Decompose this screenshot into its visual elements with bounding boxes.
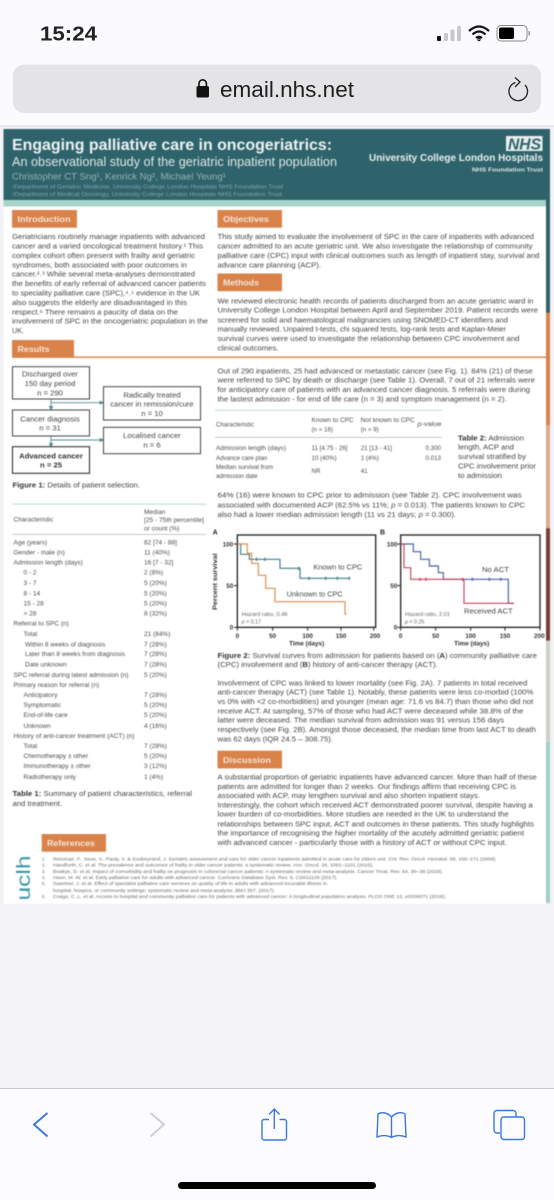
introduction text: cancer and a varied oncological treatment history.¹ This <box>12 244 204 251</box>
discussion text: the importance of recognising the higher mortality of the acutely admitted geriatric patient <box>218 831 524 838</box>
table 1 rows: Total <box>24 631 38 638</box>
table 1 rows: 5 (20%) <box>144 600 167 608</box>
table 1 rows: Chemotherapy ± other <box>24 753 89 760</box>
introduction text: to speciality palliative care (SPC),⁴˒⁵ evidence in the UK <box>12 291 200 298</box>
chart A: survival by CPC involvement: A <box>213 529 218 536</box>
axis ticks and labels: 50 <box>269 633 277 640</box>
table 2 header <box>216 417 442 433</box>
results paragraph: CPC: associated with documented ACP (62.5% vs 11%; p = 0.013). The patients known to CPC <box>218 502 525 509</box>
address text: email.nhs.net <box>220 77 354 102</box>
results paragraph: were referred to SPC by death or discharge (see Table 1). Overall, 7 out of 21 referrals were <box>216 378 535 385</box>
heading: references <box>42 834 106 852</box>
results paragraph: CPC: also had a lower median admission length (11 vs 21 days; p = 0.300). <box>218 512 456 519</box>
objectives text: cancer admitted to an acute geriatric unit. We also investigate the relationship of community <box>218 244 533 251</box>
table 1 rows: 7 (28%) <box>144 642 167 648</box>
table 1 rows: History of anti-cancer treatment (ACT) (n) <box>14 733 134 740</box>
introduction text: involvement of SPC in the oncogeriatric population in the <box>12 319 208 326</box>
table 1 rows: 5 (20%) <box>144 702 167 709</box>
discussion text <box>216 774 537 847</box>
references list: Craigs, C. L. et al. Access to hospital and community palliative care for patients with advanced cancer: A longitudinal population analysis. PLOS ONE 13, e0200071 (2018). <box>53 894 446 899</box>
heading: discussion: Discussion <box>223 756 271 765</box>
table 2 rows: 10 (40%) <box>312 455 337 462</box>
introduction text: also suggests the elderly are disadvantaged in this <box>12 300 188 307</box>
table 1 rows: 7 (28%) <box>144 651 167 658</box>
curve label: unknown: Unknown to CPC <box>287 590 343 599</box>
table 1 rows: 3 - 7 <box>24 580 37 587</box>
curve: received ACT <box>401 544 514 603</box>
discussion text: associated with ACP, may lengthen survival and also shorten inpatient stays. <box>218 793 480 800</box>
figure 2 caption: Figure 2: Survival curves from admission for patients based on ( A) community palliative care <box>218 653 537 660</box>
table 1 rows: 3 (12%) <box>144 763 167 770</box>
table 1 rows <box>14 540 177 781</box>
box: cancer diagnosis: n = 31 <box>39 423 61 432</box>
references list <box>42 856 496 899</box>
table 1 header: Characteristic <box>14 516 54 524</box>
table 1 rows: > 28 <box>24 610 37 618</box>
discussion text: lower burden of co-morbidities. More studies are needed in the UK to understand the <box>218 812 509 819</box>
trust sub name: NHS Foundation Trust <box>472 168 543 174</box>
chart B: survival by ACT history <box>380 529 545 648</box>
table 1 rows: 7 (28%) <box>144 743 167 750</box>
hazard ratio B: p = 0.25 <box>404 620 424 626</box>
discussion text: with advanced cancer - particularly those with a history of ACT or without CPC input. <box>216 840 507 847</box>
figure 1: patient selection flowchart <box>12 367 200 473</box>
table 1 rows: 5 (20%) <box>144 753 167 760</box>
icon: bookmarks book <box>377 1113 406 1138</box>
discussion text: A substantial proportion of geriatric inpatients have advanced cancer. More than half of these <box>218 774 537 781</box>
methods text: University College London Hospital between April and September 2019. Patient records were <box>218 308 538 315</box>
table 1 rows: Total <box>24 743 38 750</box>
figure 2: survival curves <box>212 529 545 648</box>
table 1 header <box>14 509 204 532</box>
table 2 rows: 0.013 <box>426 455 442 462</box>
table 2 caption: Table 2: Admission <box>458 433 524 442</box>
authors: Christopher CT Sng¹, Kenrick Ng², Michael Yeung¹ <box>12 172 226 182</box>
objectives text <box>218 234 540 270</box>
objectives text: palliative care (CPC) input with clinical outcomes such as length of inpatient stay, survival and <box>218 253 540 260</box>
axis ticks and labels: 0 <box>230 625 234 632</box>
introduction text <box>12 234 208 335</box>
table 1 rows: Anticipatory <box>24 692 58 699</box>
table 1 rows: Immunotherapy ± other <box>24 763 91 770</box>
table 1 rows: Symptomatic <box>24 702 62 709</box>
axis ticks and labels: 100 <box>387 541 398 548</box>
results paragraph: ACT: respectively (see Fig. 2B). Amongst those deceased, the median time from last ACT to death <box>218 727 536 734</box>
table 2 rows: Advance care plan <box>216 455 268 462</box>
table 2 caption: survival stratified by <box>458 452 526 461</box>
table 1 rows: 7 (28%) <box>144 662 167 668</box>
table 1 rows: 5 (20%) <box>144 712 167 719</box>
heading: discussion <box>218 751 282 768</box>
table 2 caption: length, ACP and <box>458 442 514 451</box>
table 1 rows: 0 - 2 <box>24 570 37 576</box>
box: localised cancer: n = 6 <box>143 440 161 449</box>
curve: unknown to CPC <box>237 544 347 614</box>
icon: wifi <box>469 26 489 40</box>
table 1 caption <box>12 789 192 808</box>
curve label: known: Known to CPC <box>313 563 363 572</box>
axis ticks and labels: Time (days) <box>289 641 324 648</box>
figure 2 caption <box>218 653 537 669</box>
table 2 rows: Median survival from <box>216 464 273 471</box>
table 2 header: Not known to CPC <box>361 417 415 424</box>
browser bottom toolbar <box>0 1088 554 1200</box>
axis ticks and labels <box>387 541 545 648</box>
table 2 rows <box>216 445 442 480</box>
table 1 rows: Radiotherapy only <box>24 774 77 781</box>
table 1 rows: Primary reason for referral (n) <box>14 682 99 689</box>
affiliations: ¹Department of Geriatric Medicine, University College London Hospitals NHS Foundation Trust <box>12 184 284 190</box>
box: discharged: n = 290 <box>37 388 63 397</box>
references list: Retornaz, F., Seux, V., Pauly, V. & Soubeyrand, J. Geriatric assessment and care for older cancer inpatients admitted in acute care for elders unit. Crit. Rev. Oncol. Hematol. 68, 165–171 (2008). <box>53 856 496 862</box>
icon: reload <box>509 78 528 101</box>
icon: tabs <box>494 1110 524 1140</box>
table 2 rows: 11 [4.75 - 26] <box>312 445 348 452</box>
references list: hospital, hospice, or community settings: systematic review and meta-analysis. BMJ 357, (2017). <box>53 888 275 893</box>
results paragraph: ACT: anti-cancer therapy (ACT) (see Table 1). Notably, these patients were less co-morbid (100% <box>218 690 533 697</box>
axis ticks and labels: 100 <box>465 633 476 640</box>
table 2 rows: 0.300 <box>426 445 442 452</box>
methods text: screened for solid and haematological malignancies using SNOMED-CT identifiers and <box>218 317 508 324</box>
address bar <box>13 64 541 113</box>
table 2 header: Characteristic <box>216 421 254 428</box>
box: radically treated: Radically treated <box>123 390 181 399</box>
results paragraph: ACT <box>216 680 536 743</box>
table 1 rows: 2 (8%) <box>144 570 163 576</box>
hazard ratio A: p = 0.17 <box>241 620 261 626</box>
references list: 3. <box>42 869 46 874</box>
panel: objectives <box>218 210 540 270</box>
heading: objectives: Objectives <box>223 215 269 224</box>
curve label: no ACT: No ACT <box>482 565 510 574</box>
icon: forward chevron <box>150 1113 164 1136</box>
introduction text: complex cohort often present with frailty and geriatric <box>12 253 196 260</box>
methods text: survival curves were used to investigate the relationship between CPC involvement and <box>218 336 520 343</box>
icon: back chevron <box>34 1113 48 1136</box>
status bar time: 15:24 <box>40 24 98 46</box>
heading: introduction: Introduction <box>18 215 70 224</box>
y axis label: Percent survival <box>212 553 219 610</box>
table 1 header: [25 - 75th percentile] <box>144 517 204 524</box>
table 1 rows: 82 [74 - 88] <box>144 540 177 546</box>
results paragraph: ACT: was 62 days (IQR 24.5 – 308.75). <box>216 736 333 743</box>
methods text: manually reviewed. Unpaired t-tests, chi squared tests, log-rank tests and Kaplan-Meier <box>218 327 507 334</box>
table 1 rows: Within 8 weeks of diagnosis <box>25 642 106 648</box>
axis ticks and labels: 50 <box>390 583 398 590</box>
results paragraph: ACT: Involvement of CPC was linked to lower mortality (see Fig. 2A). 7 patients in total received <box>218 680 527 687</box>
axis ticks and labels: 0 <box>236 633 240 640</box>
curve label: received ACT: Received ACT <box>464 606 513 615</box>
introduction text: cancer.²˒³ While several meta-analyses demonstrated <box>12 272 195 279</box>
table 1 caption: and treatment. <box>12 799 62 808</box>
table 1 rows: 5 (20%) <box>144 590 167 598</box>
results paragraph: for anticipatory care of patients with an advanced cancer diagnosis. 5 referrals were during <box>218 387 530 394</box>
introduction text: UK. <box>12 328 24 335</box>
table 1 rows: SPC referral during latest admission (n) <box>14 672 128 679</box>
table 2 header: Known to CPC <box>312 417 354 424</box>
box: discharged: Discharged over <box>22 370 78 379</box>
results paragraph <box>216 368 535 404</box>
introduction text: Geriatricians routinely manage inpatients with advanced <box>12 234 205 241</box>
icon: share <box>262 1109 286 1140</box>
references list: 6. <box>42 894 46 899</box>
axis ticks and labels: Time (days) <box>454 641 489 648</box>
table 1 rows: Unknown <box>24 723 51 730</box>
results paragraph: the lastest admission - for end of life care (n = 3) and symptom management (n = 2). <box>218 397 507 404</box>
axis ticks and labels: 150 <box>336 633 347 640</box>
flow connectors <box>50 399 104 447</box>
poster <box>4 129 550 904</box>
references list: Haun, M. W. et al. Early palliative care for adults with advanced cancer. Cochrane Database Syst. Rev. 6, CD011129 (2017). <box>53 875 338 880</box>
table 1: patient characteristics <box>12 504 206 781</box>
axis ticks and labels: 50 <box>432 633 440 640</box>
references list: 2. <box>42 862 46 868</box>
table 1 header: Median <box>144 509 166 516</box>
objectives text: advance care planning (ACP). <box>218 263 321 270</box>
hazard ratio B: Hazard ratio, 2.01 <box>405 612 450 618</box>
box: localised cancer: Localised cancer <box>123 431 181 440</box>
title: Engaging palliative care in oncogeriatrics: <box>12 137 332 154</box>
methods text <box>218 298 538 352</box>
table 1 rows: 5 (20%) <box>144 580 167 587</box>
axis ticks and labels: 50 <box>226 583 234 590</box>
UCLH logo: uclh <box>14 856 35 900</box>
icon: lock <box>196 80 209 98</box>
table 1 rows: Age (years) <box>14 540 47 546</box>
results paragraph: ACT: vs 0% with <2 co-morbidities) and younger (mean age: 71.6 vs 84.7) than those who did not <box>218 699 533 706</box>
table 1 rows: 4 (16%) <box>144 723 167 730</box>
table 2 caption <box>458 433 536 480</box>
results paragraph: ACT: latter were deceased. The median survival from admission was 91 versus 156 days <box>218 718 505 725</box>
table 1 rows: 21 (84%) <box>144 631 170 638</box>
heading: methods: Methods <box>223 278 259 288</box>
table 1 rows: 8 (32%) <box>144 610 167 618</box>
hazard ratio A <box>241 612 288 626</box>
box: cancer diagnosis: Cancer diagnosis <box>20 414 80 423</box>
table 1 header: or count (%) <box>144 526 179 532</box>
table 1 rows: 5 (20%) <box>144 672 167 679</box>
discussion text: patients are admitted for longer than 2 weeks. Our findings affirm that receiving CPC is <box>218 784 517 791</box>
box: localised cancer <box>104 427 200 454</box>
table 1 rows: Date unknown <box>25 662 67 668</box>
subtitle: An observational study of the geriatric inpatient population <box>12 155 337 169</box>
heading: results <box>12 340 546 358</box>
table 1 rows: End-of-life care <box>24 712 68 719</box>
table 2 header: p-value <box>416 421 442 428</box>
table 2: CPC involvement <box>215 410 442 480</box>
objectives text: This study aimed to evaluate the involvement of SPC in the care of inpatients with advanced <box>218 234 534 241</box>
discussion text: relationships between SPC input, ACT and outcomes in these patients. This study highlights <box>218 821 535 828</box>
axis ticks and labels: 0 <box>394 625 398 632</box>
table 1 rows: Later than 8 weeks from diagnosis <box>25 651 126 658</box>
introduction text: respect.⁶ There remains a paucity of data on the <box>12 309 178 316</box>
introduction text: syndromes, both associated with poor outcomes in <box>12 263 187 270</box>
table 1 rows: 7 (28%) <box>144 692 167 699</box>
heading: introduction <box>12 210 77 228</box>
methods text: clinical outcomes. <box>218 345 279 352</box>
references list: Handforth, C. et al. The prevalence and outcomes of frailty in older cancer patients: a systematic review. Ann. Oncol. 26, 1091–1101 (2015). <box>53 862 374 868</box>
box: discharged <box>12 367 90 399</box>
table 1 rows: Admission length (days) <box>14 560 83 566</box>
header banner <box>4 129 550 206</box>
icon: battery <box>497 26 530 41</box>
axis ticks and labels <box>223 541 381 648</box>
table 1 rows: 15 - 28 <box>24 600 44 608</box>
table 1 rows: 8 - 14 <box>24 590 41 598</box>
browser top bar <box>0 0 554 126</box>
axis ticks and labels: 200 <box>534 633 545 640</box>
table 1 rows: Gender - male (n) <box>14 550 65 556</box>
NHS logo: NHS <box>508 136 542 154</box>
references list: Gaertner, J. et al. Effect of specialist palliative care services on quality of life in adults with advanced incurable illness in <box>53 881 328 886</box>
box: advanced cancer: n = 25 <box>40 461 63 470</box>
figure 1 caption: Figure 1: Details of patient selection. <box>12 482 140 490</box>
curve: known to CPC <box>237 544 350 580</box>
box: radically treated: n = 10 <box>141 409 163 418</box>
references list: 4. <box>42 875 46 880</box>
references list: 5. <box>42 881 46 886</box>
poster right edge colour strip <box>546 129 550 903</box>
references list: Boakye, D. et al. Impact of comorbidity and frailty on prognosis in colorectal cancer patients: A systematic review and meta-analysis. Cancer Treat. Rev. 64, 30–39 (2018). <box>53 869 443 874</box>
table 2 rows: 41 <box>361 468 368 475</box>
table 2 rows: NR <box>312 468 321 475</box>
hazard ratio B <box>404 612 450 626</box>
table 2 rows: admission date <box>216 473 258 480</box>
chart B: survival by ACT history: B <box>380 529 385 536</box>
box: advanced cancer <box>12 447 90 473</box>
table 1 rows: 11 (40%) <box>144 550 170 556</box>
icon: signal strength <box>437 26 461 41</box>
results paragraph: ACT: receive ACT. At sampling, 57% of those who had ACT were deceased while 38.8% of the <box>218 708 523 715</box>
panel: introduction <box>12 210 208 335</box>
table 2 caption: CPC involvement prior <box>458 462 536 471</box>
box: radically treated: cancer in remission/cure <box>110 400 194 409</box>
box: radically treated <box>104 387 200 420</box>
panel: methods <box>218 274 538 352</box>
figure 2 caption: (CPC) involvement and ( B) history of anti-cancer therapy (ACT). <box>218 662 438 669</box>
axis ticks and labels: 200 <box>370 633 381 640</box>
table 2 rows: Admission length (days) <box>216 445 286 452</box>
affiliations <box>12 184 284 198</box>
axis ticks and labels: 100 <box>302 633 313 640</box>
box: discharged: 150 day period <box>25 379 75 388</box>
table 1 rows: 16 [7 - 32] <box>144 560 173 566</box>
methods text: We reviewed electronic health records of patients discharged from an acute geriatric ward in <box>218 298 534 305</box>
heading: references: References <box>47 839 95 848</box>
heading: methods <box>218 274 282 291</box>
box: advanced cancer: Advanced cancer <box>19 451 83 460</box>
table 2 header: (n = 16) <box>312 426 333 433</box>
references list: 1. <box>42 856 46 862</box>
table 2 header: (n = 9) <box>361 426 379 433</box>
heading: results: Results <box>18 345 50 354</box>
box: cancer diagnosis <box>12 410 90 436</box>
home indicator <box>178 1182 376 1189</box>
table 1 caption: Table 1: Summary of patient characteristics, referral <box>12 789 192 798</box>
discussion text: Interestingly, the cohort which received ACT demonstrated poorer survival, despite having a <box>218 803 533 810</box>
axis ticks and labels: 0 <box>399 633 403 640</box>
table 1 rows: Referral to SPC (n) <box>14 620 69 628</box>
axis ticks and labels: 150 <box>500 633 511 640</box>
results paragraph: CPC <box>218 492 525 519</box>
table 1 rows: 1 (4%) <box>144 774 163 781</box>
panel: discussion <box>216 751 537 847</box>
introduction text: the benefits of early referral of advanced cancer patients <box>12 281 207 288</box>
axis ticks and labels: 100 <box>223 541 234 548</box>
table 2 rows: 21 [13 - 41] <box>361 445 392 452</box>
affiliations: ²Department of Medical Oncology, University College London Hospitals NHS Foundation Trust <box>12 192 283 198</box>
chart A: survival by CPC involvement <box>212 529 381 648</box>
heading: objectives <box>218 210 282 228</box>
results paragraph: Out of 290 inpatients, 25 had advanced or metastatic cancer (see Fig. 1). 84% (21) of these <box>218 368 533 375</box>
table 2 rows: 1 (4%) <box>361 455 379 462</box>
trust name: University College London Hospitals <box>369 152 543 164</box>
results paragraph: CPC: 64% (16) were known to CPC prior to admission (see Table 2). CPC involvement was <box>218 492 522 499</box>
hazard ratio A: Hazard ratio, 0.46 <box>242 612 288 618</box>
table 2 caption: to admission <box>458 471 502 480</box>
curve: no ACT <box>401 544 514 603</box>
